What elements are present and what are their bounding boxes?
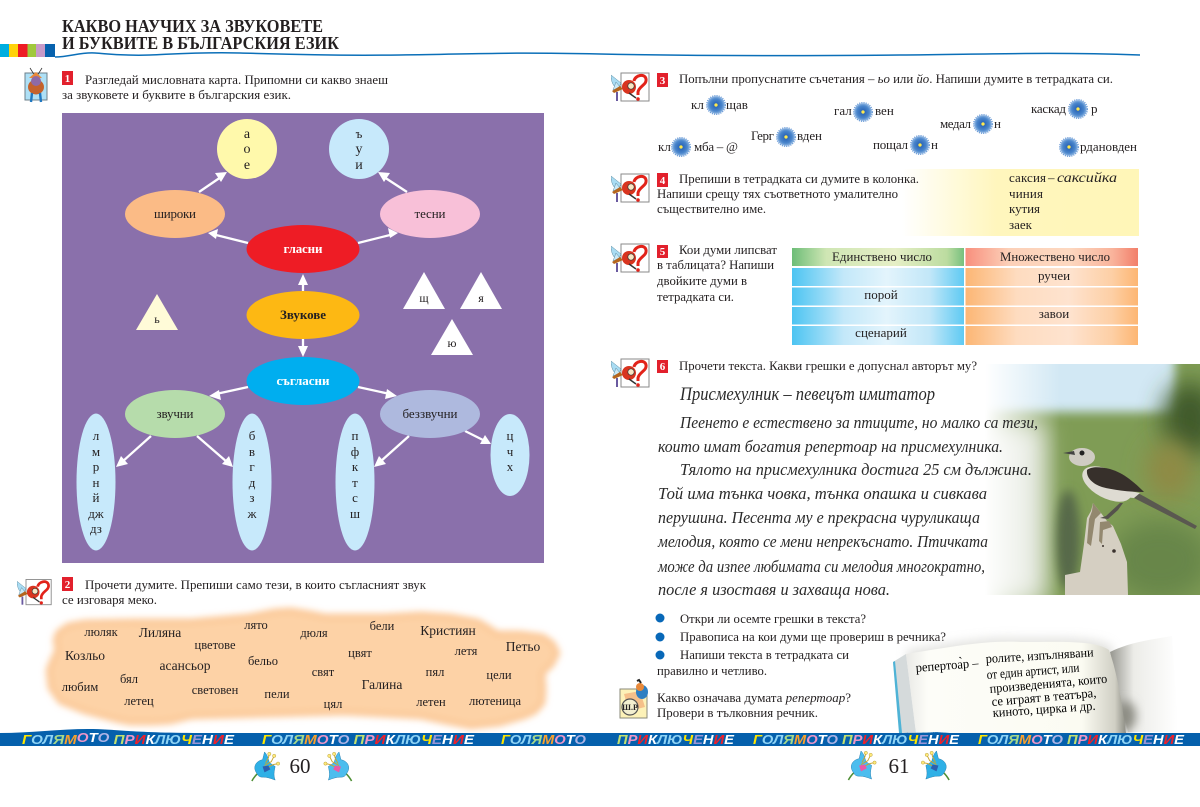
word cloud panel bbox=[48, 610, 558, 727]
node: сонорни съгласни: н bbox=[93, 475, 100, 490]
node: беззвучни съгласни: п bbox=[352, 428, 359, 443]
open book with definition: произведенията, които bbox=[989, 671, 1108, 696]
node: а о е: е bbox=[244, 158, 250, 173]
icon: bee in frame bbox=[25, 68, 47, 102]
triangle: ь bbox=[136, 294, 178, 330]
task 4 instruction bbox=[657, 171, 919, 216]
table singular plural: Множествено число bbox=[1000, 249, 1110, 264]
word cloud panel: цял bbox=[324, 697, 342, 711]
open book with definition: репертоа̀р – bbox=[915, 655, 980, 675]
task 3 words with flowers: р bbox=[1091, 101, 1098, 116]
colour strip bbox=[0, 44, 55, 57]
bird bbox=[1063, 448, 1197, 529]
open book with definition: се играят в театъра, bbox=[991, 685, 1097, 709]
task 5 instruction: тетрадката си. bbox=[657, 289, 734, 304]
triangle: щ: щ bbox=[419, 291, 429, 305]
task 3 words with flowers: Герг bbox=[751, 128, 774, 143]
table singular plural: завои bbox=[1039, 306, 1069, 321]
page number 61 with flowers: 61 bbox=[888, 754, 910, 778]
triangle: я bbox=[460, 272, 502, 309]
dictionary prompt: Какво означава думата репертоар? bbox=[657, 690, 851, 705]
node: звучни съгласни bbox=[232, 414, 272, 550]
table singular plural bbox=[792, 248, 1138, 345]
task 6 instruction: Прочети текста. Какви грешки е допуснал авторът му? bbox=[679, 358, 977, 373]
task 4 yellow word panel: саксия bbox=[1009, 170, 1046, 185]
handwritten text: перушина. Песента му е прекрасна чуруликаща bbox=[658, 508, 980, 527]
open book with definition bbox=[893, 636, 1178, 733]
node: сонорни съгласни: р bbox=[93, 459, 99, 474]
footer ribbon: О bbox=[77, 731, 89, 745]
task 4 instruction: Напиши срещу тях съответното умалително bbox=[657, 186, 898, 201]
node: звучни съгласни: в bbox=[249, 444, 255, 459]
node: съгласни: съгласни bbox=[276, 373, 330, 388]
handwritten text: мелодия, която се мени непрекъснато. Птичката bbox=[657, 532, 988, 551]
task 5 instruction: в таблицата? Напиши bbox=[657, 257, 774, 272]
node: ъ у и bbox=[329, 119, 389, 179]
node: широки: широки bbox=[154, 206, 196, 221]
node: ц ч х: ц bbox=[507, 428, 514, 443]
task 1 instruction bbox=[62, 71, 388, 102]
node: сонорни съгласни: дж bbox=[88, 506, 105, 521]
question list: правилно и четливо. bbox=[657, 663, 767, 678]
table singular plural: порой bbox=[864, 287, 898, 302]
task 1 instruction: 1 bbox=[65, 73, 70, 85]
word cloud panel: летя bbox=[455, 644, 478, 658]
word cloud panel: лютеница bbox=[469, 694, 521, 708]
task 3 icon bbox=[611, 73, 649, 101]
table singular plural: сценарий bbox=[855, 325, 907, 340]
task 4 instruction: 4 bbox=[660, 175, 666, 187]
footer ribbon: ГОЛЯМ bbox=[22, 733, 75, 747]
handwritten text: може да изпее любимата си мелодия многократно, bbox=[657, 557, 985, 576]
task 4 instruction: Препиши в тетрадката си думите в колонка. bbox=[679, 171, 919, 186]
question list: Откри ли осемте грешки в текста? bbox=[680, 611, 866, 626]
node: звучни съгласни: б bbox=[249, 428, 256, 443]
task 3 words with flowers: каскад bbox=[1031, 101, 1066, 116]
open book with definition: от един артист, или bbox=[986, 660, 1080, 682]
task 3 words with flowers bbox=[658, 96, 1137, 156]
node: беззвучни: беззвучни bbox=[402, 406, 458, 421]
page number 61 with flowers bbox=[848, 751, 949, 780]
node: беззвучни съгласни: ф bbox=[351, 444, 359, 459]
node: беззвучни съгласни bbox=[336, 414, 374, 550]
node: тесни bbox=[380, 190, 480, 238]
node: Звукове bbox=[246, 291, 360, 339]
task 4 yellow word panel: – bbox=[1047, 170, 1055, 185]
node: звучни съгласни: ж bbox=[247, 506, 258, 521]
word cloud panel: свят bbox=[312, 665, 335, 679]
word cloud panel: Петьо bbox=[506, 639, 541, 654]
task 3 words with flowers: н bbox=[931, 137, 938, 152]
task 4 yellow word panel: чиния bbox=[1009, 186, 1043, 201]
task 6 icon bbox=[611, 359, 649, 387]
handwritten text: Тялото на присмехулника достига 25 см дължина. bbox=[680, 460, 1032, 479]
node: Звукове: Звукове bbox=[280, 307, 326, 322]
open book with definition: ролите, изпълнявани bbox=[985, 644, 1094, 666]
node: звучни съгласни: г bbox=[249, 459, 255, 474]
node: сонорни съгласни: дз bbox=[90, 521, 102, 536]
word cloud panel: любим bbox=[62, 680, 98, 694]
handwritten text: които имат богатия репертоар на присмехулника. bbox=[658, 437, 1003, 456]
footer ribbon bbox=[0, 729, 1200, 747]
word cloud panel: Козльо bbox=[65, 648, 105, 663]
word cloud panel: пял bbox=[426, 665, 444, 679]
task 2 instruction bbox=[62, 577, 427, 607]
node: ъ у и: и bbox=[355, 158, 363, 173]
word cloud panel: цветове bbox=[194, 638, 236, 652]
task 4 yellow word panel bbox=[902, 169, 1139, 236]
word cloud panel: Галина bbox=[362, 677, 402, 692]
task 3 words with flowers: гал bbox=[834, 103, 852, 118]
word cloud panel: цели bbox=[486, 668, 512, 682]
task 3 words with flowers: вен bbox=[875, 103, 894, 118]
node: гласни: гласни bbox=[284, 241, 323, 256]
task 3 words with flowers: щав bbox=[726, 97, 748, 112]
title: КАКВО НАУЧИХ ЗА ЗВУКОВЕТЕ bbox=[62, 16, 323, 36]
handwritten text: Пеенето е естествено за птиците, но малко са тези, bbox=[679, 413, 1038, 432]
word cloud panel: люляк bbox=[84, 625, 119, 639]
task 3 words with flowers: вден bbox=[797, 128, 822, 143]
task 4 icon bbox=[611, 174, 649, 202]
triangle: ю: ю bbox=[448, 336, 457, 350]
task 1 instruction: за звуковете и буквите в българския език. bbox=[62, 87, 291, 102]
task 6 instruction: 6 bbox=[660, 361, 666, 373]
arrows bbox=[116, 172, 491, 467]
question list: Правописа на кои думи ще провериш в речника? bbox=[680, 629, 946, 644]
table singular plural: ручеи bbox=[1038, 268, 1070, 283]
word cloud panel: Лиляна bbox=[139, 625, 181, 640]
footer ribbon: ГОЛЯМОТО ПРИКЛЮЧЕНИЕ bbox=[978, 733, 1185, 747]
footer ribbon: ГОЛЯМОТО ПРИКЛЮЧЕНИЕ bbox=[753, 733, 960, 747]
node: беззвучни съгласни: ш bbox=[350, 506, 360, 521]
word cloud panel: световен bbox=[192, 683, 239, 697]
task 5 instruction: Кои думи липсват bbox=[679, 242, 777, 257]
node: сонорни съгласни: й bbox=[93, 490, 100, 505]
task 2 instruction: Прочети думите. Препиши само тези, в които съгласният звук bbox=[85, 577, 427, 592]
node: а о е: о bbox=[244, 142, 250, 157]
node: а о е: а bbox=[244, 127, 251, 142]
word cloud panel: пели bbox=[264, 687, 290, 701]
handwritten text: Присмехулник – певецът имитатор bbox=[679, 384, 935, 405]
task 3 instruction: 3 bbox=[660, 75, 666, 87]
node: ц ч х bbox=[490, 414, 530, 496]
node: гласни bbox=[246, 225, 360, 273]
word cloud panel: бял bbox=[120, 672, 138, 686]
node: ъ у и: ъ bbox=[356, 126, 363, 141]
footer ribbon: ПРИКЛЮЧЕНИЕ bbox=[617, 733, 735, 747]
icon: dragonfly task 2 bbox=[17, 580, 51, 605]
question list: Напиши текста в тетрадката си bbox=[680, 647, 849, 662]
dictionary prompt: Провери в тълковния речник. bbox=[657, 705, 818, 720]
node: беззвучни bbox=[380, 390, 480, 438]
node: ъ у и: у bbox=[356, 142, 362, 157]
node: беззвучни съгласни: с bbox=[352, 490, 358, 505]
task 2 instruction: 2 bbox=[65, 579, 71, 591]
task 4 yellow word panel: заек bbox=[1009, 217, 1033, 232]
task 3 words with flowers: рдановден bbox=[1080, 139, 1137, 154]
task 3 words with flowers: пощал bbox=[873, 137, 908, 152]
node: сонорни съгласни: л bbox=[93, 428, 100, 443]
table singular plural: Единствено число bbox=[832, 249, 932, 264]
task 3 words with flowers: кл bbox=[691, 97, 704, 112]
task 5 icon bbox=[611, 244, 649, 272]
task 5 instruction bbox=[657, 242, 777, 304]
task 5 instruction: 5 bbox=[660, 246, 666, 258]
footer ribbon: ТО bbox=[89, 731, 107, 745]
task 3 words with flowers: медал bbox=[940, 116, 972, 131]
stump bbox=[1065, 503, 1128, 595]
icon: dictionary bee: Ш.Р bbox=[622, 703, 638, 712]
task 5 instruction: двойките думи в bbox=[657, 273, 747, 288]
node: сонорни съгласни: м bbox=[92, 444, 100, 459]
icon: dictionary bee bbox=[620, 680, 648, 718]
node: тесни: тесни bbox=[414, 206, 446, 221]
node: звучни съгласни: д bbox=[249, 475, 256, 490]
task 1 instruction: Разгледай мисловната карта. Припомни си какво знаеш bbox=[85, 72, 388, 87]
word cloud panel: бельо bbox=[248, 654, 278, 668]
word cloud panel: лято bbox=[244, 618, 268, 632]
node: сонорни съгласни bbox=[76, 414, 116, 550]
task 3 instruction: Попълни пропуснатите съчетания – ьо или йо. Напиши думите в тетрадката си. bbox=[679, 71, 1113, 86]
task 4 yellow word panel: саксийка bbox=[1057, 171, 1117, 186]
triangle: я: я bbox=[478, 291, 484, 305]
handwritten text: после я изоставя и захваща нова. bbox=[658, 580, 890, 599]
task 4 yellow word panel: кутия bbox=[1009, 201, 1040, 216]
bird photo bbox=[990, 364, 1200, 595]
handwritten text bbox=[657, 384, 1038, 599]
footer ribbon: ПРИКЛЮЧЕНИЕ bbox=[114, 733, 232, 747]
word cloud panel: дюля bbox=[300, 626, 328, 640]
triangle: щ bbox=[403, 272, 445, 309]
handwritten text: Той има тънка човка, тънка опашка и сивкава bbox=[658, 484, 987, 503]
node: а о е bbox=[217, 119, 277, 179]
title: И БУКВИТЕ В БЪЛГАРСКИЯ ЕЗИК bbox=[62, 33, 339, 53]
task 4 instruction: съществително име. bbox=[657, 201, 766, 216]
task 2 instruction: се изговаря меко. bbox=[62, 592, 157, 607]
word cloud panel: асансьор bbox=[159, 658, 211, 673]
node: звучни bbox=[125, 390, 225, 438]
task 3 words with flowers: н bbox=[994, 116, 1001, 131]
word cloud panel: цвят bbox=[348, 646, 372, 660]
word cloud panel: летец bbox=[124, 694, 154, 708]
page number 60 with flowers: 60 bbox=[290, 754, 310, 778]
open book with definition: киното, цирка и др. bbox=[992, 698, 1096, 720]
dictionary prompt bbox=[657, 690, 851, 720]
node: звучни: звучни bbox=[156, 406, 194, 421]
triangle: ь: ь bbox=[154, 312, 160, 326]
task 3 words with flowers: мба – @ bbox=[694, 139, 738, 154]
task 3 words with flowers: кл bbox=[658, 139, 671, 154]
node: беззвучни съгласни: т bbox=[352, 475, 358, 490]
node: звучни съгласни: з bbox=[249, 490, 255, 505]
footer ribbon: ГОЛЯМОТО bbox=[501, 733, 586, 747]
page number 60 with flowers bbox=[252, 752, 352, 781]
title bbox=[62, 16, 339, 53]
node: ц ч х: ч bbox=[507, 444, 514, 459]
triangle: ю bbox=[431, 319, 473, 355]
node: беззвучни съгласни: к bbox=[352, 459, 359, 474]
node: широки bbox=[125, 190, 225, 238]
word cloud panel: бели bbox=[370, 619, 395, 633]
word cloud panel: Кристиян bbox=[420, 623, 476, 638]
question list bbox=[656, 611, 946, 678]
mind map panel bbox=[62, 113, 544, 563]
node: ц ч х: х bbox=[507, 459, 514, 474]
footer ribbon: ГОЛЯМОТО ПРИКЛЮЧЕНИЕ bbox=[262, 733, 475, 747]
word cloud panel: летен bbox=[416, 695, 446, 709]
node: съгласни bbox=[246, 357, 360, 405]
